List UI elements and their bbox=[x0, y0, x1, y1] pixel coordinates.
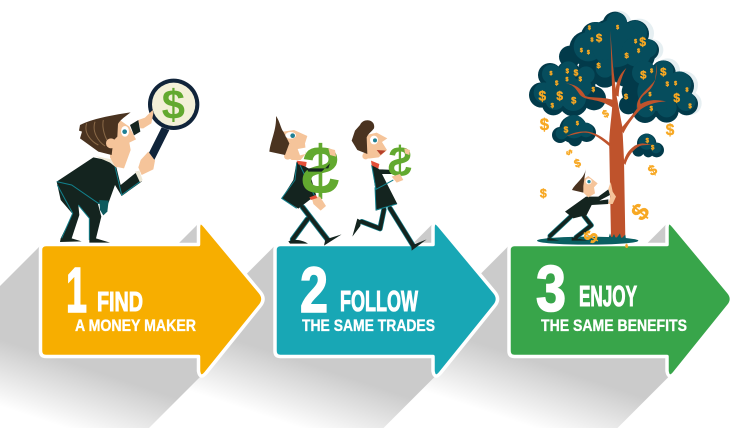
dollar signs on tree and falling: $ bbox=[555, 81, 559, 87]
dollar signs on tree and falling: $ bbox=[673, 91, 680, 105]
long shadow: step 1 bbox=[0, 222, 205, 428]
dollar signs on tree and falling: $ bbox=[625, 244, 628, 250]
dollar signs on tree and falling: $ bbox=[574, 68, 579, 78]
dollar signs on tree and falling: $ bbox=[601, 108, 611, 121]
illustration: man with magnifying glass bbox=[57, 79, 199, 243]
dollar signs on tree and falling: $ bbox=[616, 25, 619, 31]
arrow shape green bbox=[509, 223, 732, 376]
dollar signs on tree and falling: $ bbox=[651, 146, 655, 152]
dollar signs on tree and falling: $ bbox=[639, 35, 646, 49]
dollar signs on tree and falling: $ bbox=[579, 77, 583, 83]
subheading: THE SAME TRADES bbox=[302, 317, 435, 335]
heading FIND: FIND bbox=[97, 286, 143, 317]
figure: man body bbox=[57, 110, 155, 243]
subheading: THE SAME BENEFITS bbox=[541, 317, 687, 335]
long shadow: step 3 bbox=[430, 225, 668, 428]
dollar signs on tree and falling: $ bbox=[550, 71, 553, 77]
number 2: 2 bbox=[300, 254, 328, 326]
dollar signs on tree and falling: $ bbox=[646, 139, 650, 145]
dollar signs on tree and falling: $ bbox=[624, 92, 629, 101]
dollar signs on tree and falling: $ bbox=[597, 61, 602, 70]
heading ENJOY: ENJOY bbox=[579, 281, 637, 313]
tree trunk and branches bbox=[566, 31, 666, 238]
dollar signs on tree and falling: $ bbox=[674, 81, 677, 87]
dollar signs on tree and falling: $ bbox=[645, 161, 660, 179]
tree canopy halo bbox=[605, 11, 702, 115]
dollar signs on tree and falling: $ bbox=[666, 82, 670, 88]
dollar signs on tree and falling: $ bbox=[637, 49, 640, 55]
arrow panel: step 3 enjoy bbox=[509, 223, 732, 376]
icon: magnifying glass: $ bbox=[162, 81, 185, 128]
dollar signs on tree and falling: $ bbox=[592, 87, 596, 93]
figure: second man with small dollar: $ bbox=[388, 138, 412, 186]
dollar signs on tree and falling: $ bbox=[596, 32, 603, 44]
figure: second man with small dollar bbox=[352, 120, 427, 251]
dollar signs on tree and falling: $ bbox=[573, 157, 583, 171]
dollar signs on tree and falling: $ bbox=[634, 39, 637, 45]
figure: first man with large dollar bbox=[269, 116, 342, 246]
dollar signs on tree and falling: $ bbox=[686, 88, 689, 94]
dollar signs on tree and falling: $ bbox=[591, 38, 594, 44]
arrow shape teal bbox=[275, 223, 498, 376]
illustration: money tree with man bbox=[529, 11, 702, 250]
dollar signs on tree and falling: $ bbox=[660, 66, 667, 78]
arrow shape orange bbox=[40, 223, 263, 376]
dollar signs on tree and falling: $ bbox=[539, 88, 547, 103]
dollar signs on tree and falling: $ bbox=[566, 77, 569, 83]
arrow panel: step 1 find bbox=[40, 223, 263, 376]
dollar signs on tree and falling: $ bbox=[626, 199, 655, 226]
number 1: 1 bbox=[66, 254, 87, 326]
dollar signs on tree and falling: $ bbox=[556, 89, 563, 103]
number 3: 3 bbox=[536, 252, 566, 325]
dollar signs on tree and falling: $ bbox=[650, 69, 653, 75]
dollar signs on tree and falling: $ bbox=[576, 121, 579, 127]
dollar signs on tree and falling: $ bbox=[540, 115, 550, 134]
dollar signs on tree and falling: $ bbox=[564, 125, 569, 135]
heading FOLLOW: FOLLOW bbox=[340, 286, 418, 318]
dollar signs on tree and falling: $ bbox=[551, 104, 555, 110]
dollar signs on tree and falling bbox=[539, 25, 692, 250]
tree canopy light layer bbox=[534, 12, 696, 153]
ground patch with grass bbox=[537, 233, 638, 245]
dollar signs on tree and falling: $ bbox=[571, 96, 577, 106]
arrow panel: step 2 follow bbox=[275, 223, 498, 376]
dollar signs on tree and falling: $ bbox=[580, 48, 583, 54]
figure: first man with large dollar: $ bbox=[302, 133, 340, 209]
dollar signs on tree and falling: $ bbox=[564, 148, 575, 157]
icon: magnifying glass bbox=[147, 79, 199, 161]
dollar signs on tree and falling: $ bbox=[666, 122, 675, 139]
subheading: A MONEY MAKER bbox=[75, 317, 196, 335]
dollar signs on tree and falling: $ bbox=[625, 51, 630, 60]
dollar signs on tree and falling: $ bbox=[640, 70, 647, 82]
figure: man pushing tree bbox=[547, 168, 616, 241]
illustration: two men carrying dollar signs bbox=[269, 116, 427, 251]
long shadow: step 2 bbox=[195, 225, 434, 428]
dollar signs on tree and falling: $ bbox=[540, 187, 547, 201]
tree canopy dark layer bbox=[529, 12, 698, 157]
dollar signs on tree and falling: $ bbox=[649, 92, 652, 98]
dollar signs on tree and falling: $ bbox=[566, 69, 570, 75]
dollar signs on tree and falling: $ bbox=[580, 227, 604, 247]
dollar signs on tree and falling: $ bbox=[588, 25, 591, 31]
dollar signs on tree and falling: $ bbox=[688, 104, 692, 110]
figure: man head bbox=[79, 112, 136, 168]
dollar signs on tree and falling: $ bbox=[650, 106, 654, 112]
dollar signs on tree and falling: $ bbox=[587, 50, 590, 56]
